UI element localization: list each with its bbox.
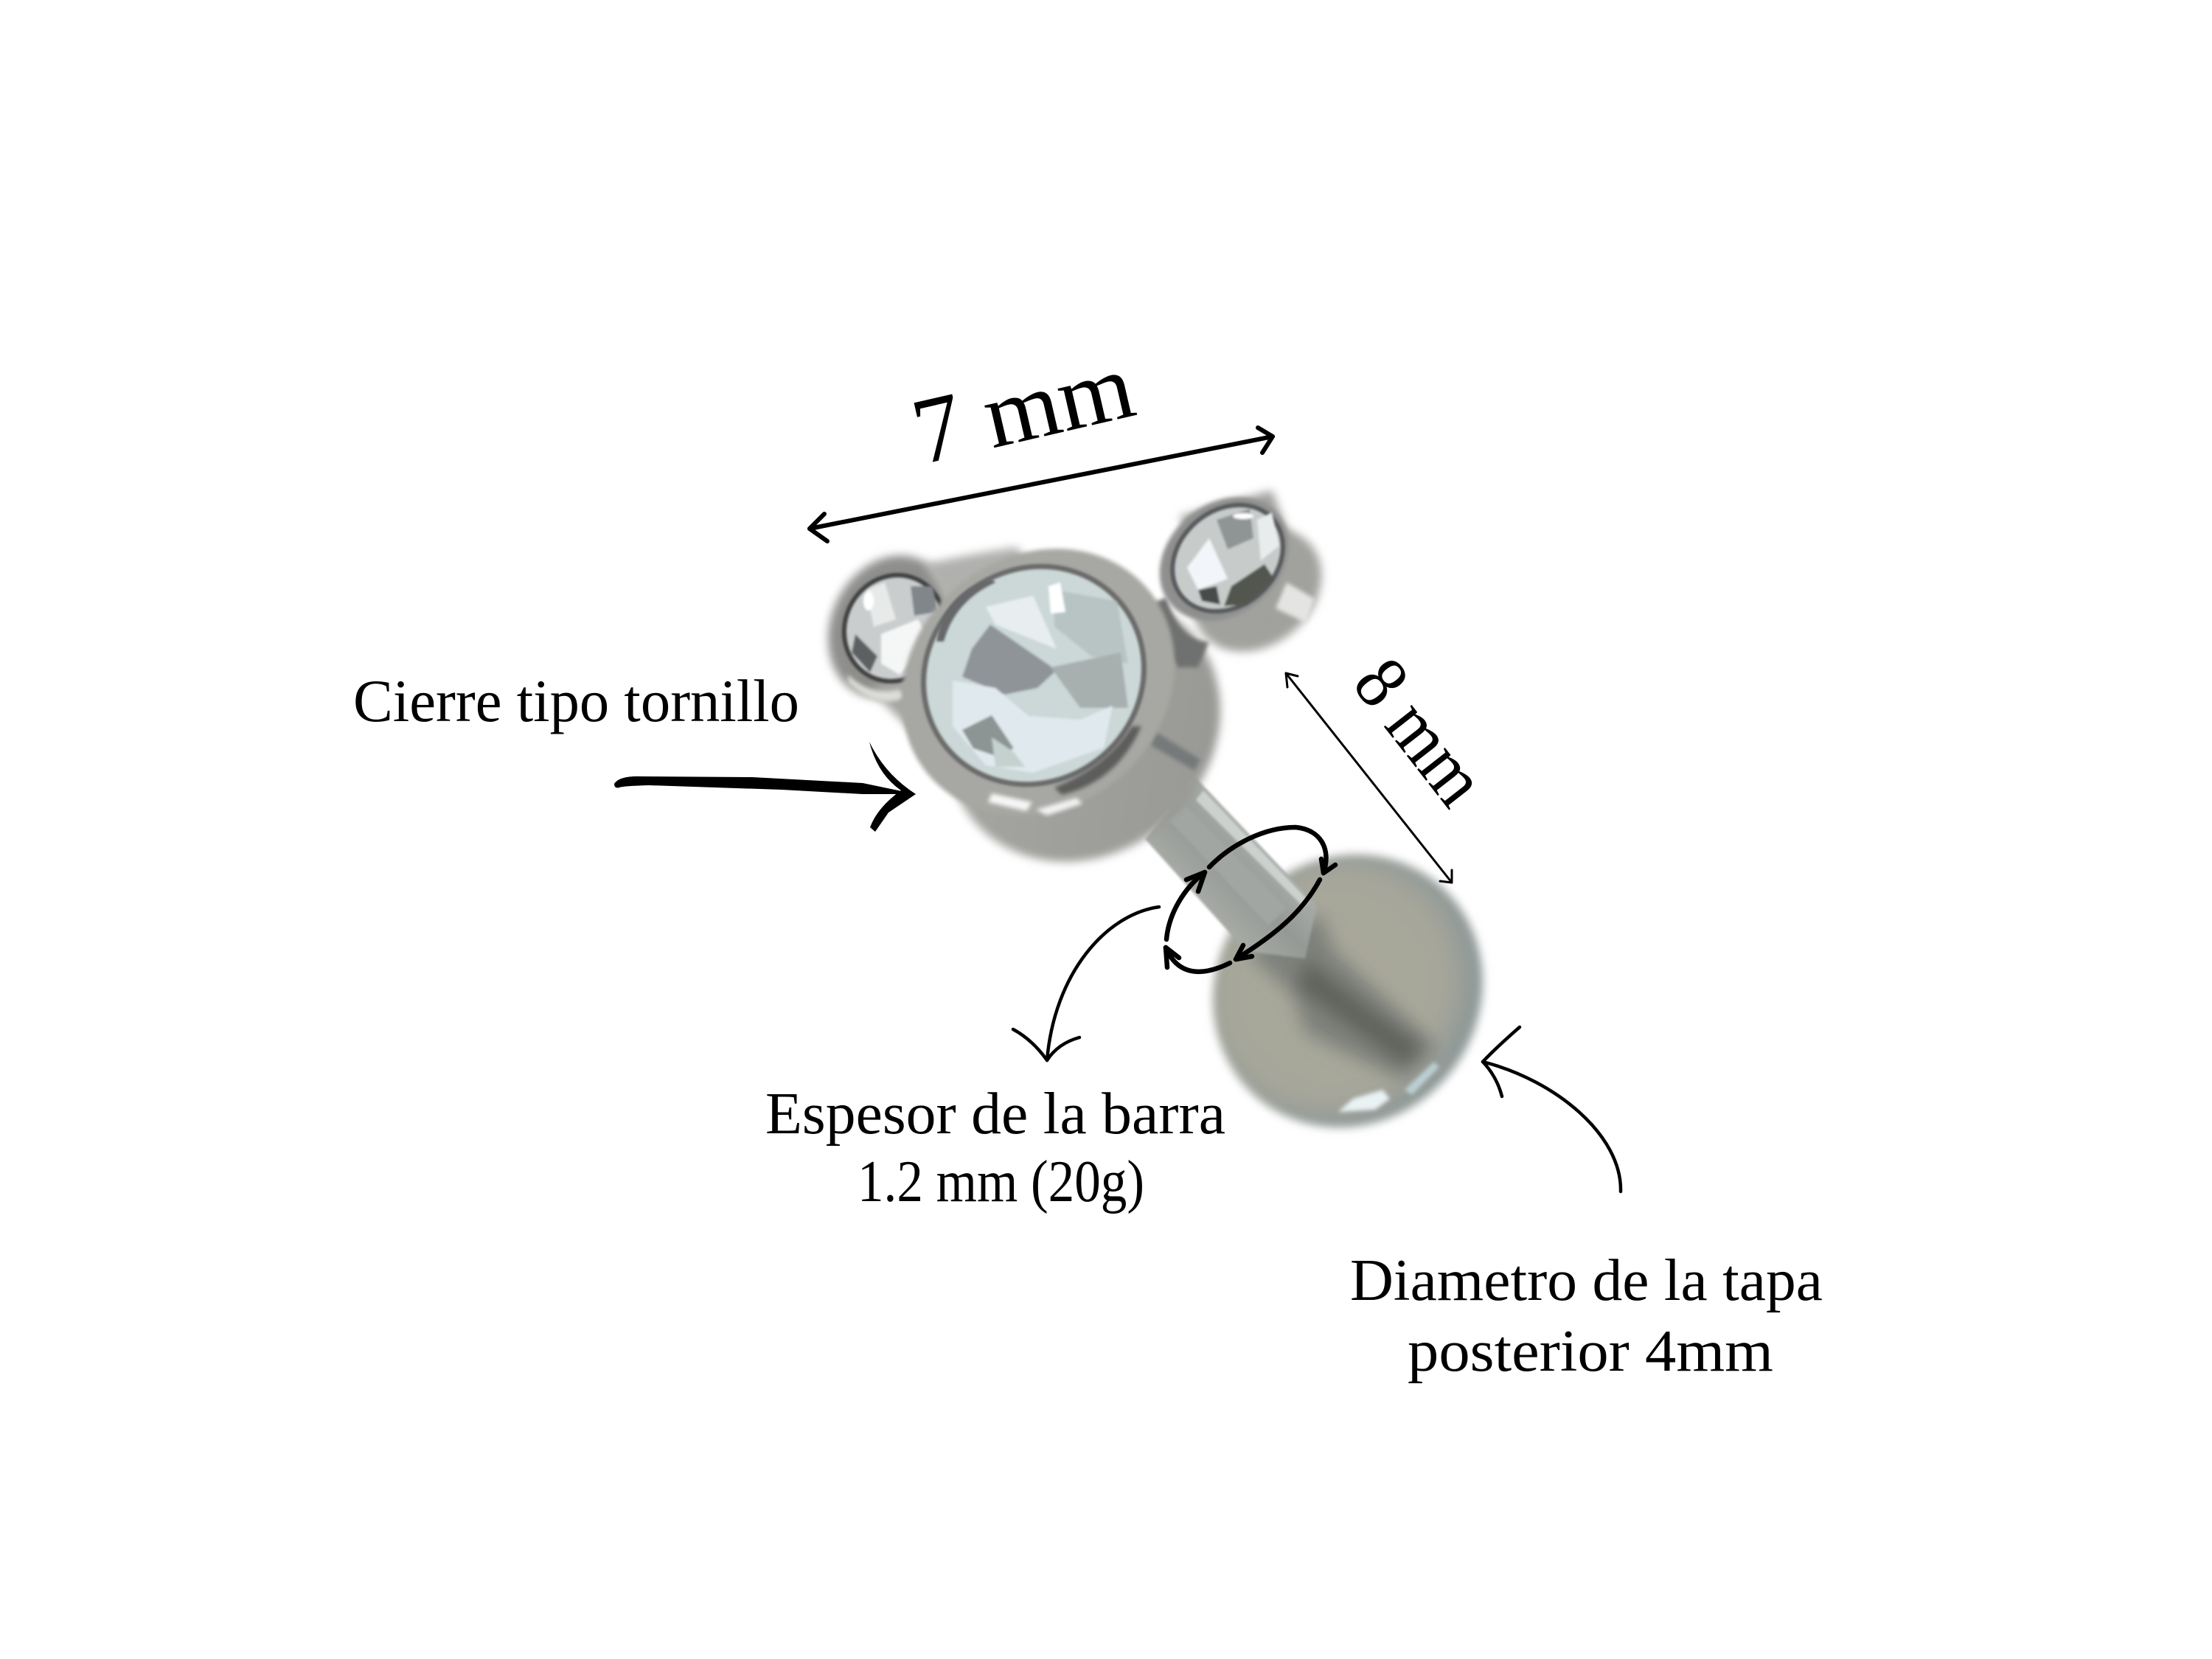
label: 8 mm: 8 mm xyxy=(1338,642,1503,821)
back disc of the piercing xyxy=(1158,799,1538,1183)
arrow: 8 mm dimension xyxy=(1286,673,1452,883)
label: back cap diameter xyxy=(1350,1248,1823,1384)
label: back cap diameter: Diametro de la tapa xyxy=(1350,1248,1823,1313)
arrow: back cap diameter xyxy=(1483,1027,1621,1192)
label: 7 mm: 7 mm xyxy=(902,333,1144,484)
arrow: bar thickness pointer xyxy=(1013,907,1159,1060)
label: bar thickness: 1.2 mm (20g) xyxy=(858,1150,1144,1214)
label: back cap diameter: posterior 4mm xyxy=(1408,1319,1773,1384)
small left gem xyxy=(824,556,965,702)
large gem body xyxy=(893,540,1275,917)
arrow: screw closure xyxy=(614,742,916,832)
large gem front xyxy=(847,493,1229,871)
left gem body xyxy=(805,535,1032,730)
right gem body and connector xyxy=(1150,490,1346,678)
label: bar thickness xyxy=(765,1082,1225,1214)
bar thickness circular arrows xyxy=(1166,827,1335,972)
arrow: 7 mm dimension xyxy=(810,428,1273,541)
label: bar thickness: Espesor de la barra xyxy=(765,1082,1225,1147)
label: Cierre tipo tornillo: Cierre tipo tornillo xyxy=(353,667,799,734)
bar xyxy=(1145,778,1317,959)
small right gem xyxy=(1135,471,1313,647)
